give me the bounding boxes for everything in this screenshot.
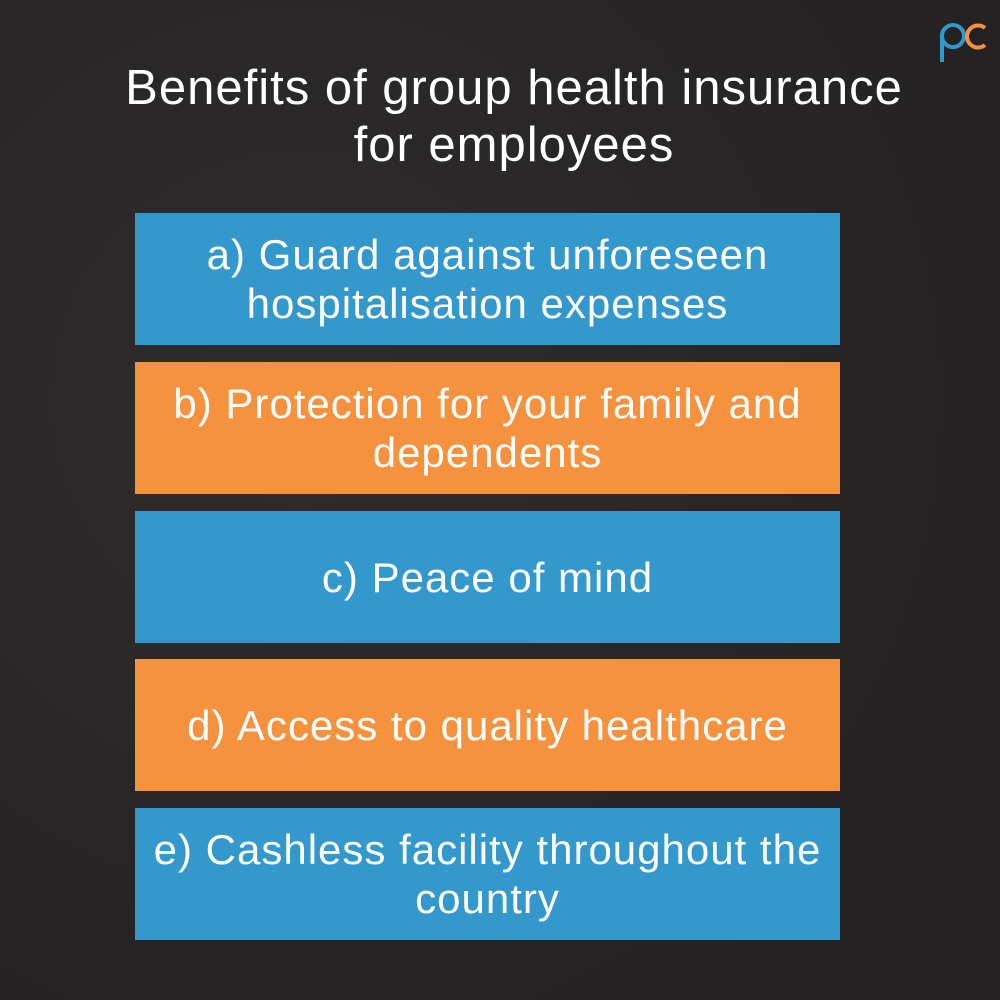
box b: b) Protection for your family and — [173, 380, 802, 427]
box c — [135, 511, 840, 643]
logo — [940, 23, 986, 62]
box e: e) Cashless facility throughout the — [154, 826, 821, 873]
box b: dependents — [373, 429, 602, 476]
box a — [135, 213, 840, 345]
box e: country — [415, 875, 560, 922]
title: Benefits of group health insurance — [125, 61, 903, 115]
box a: hospitalisation expenses — [247, 280, 728, 327]
box c: c) Peace of mind — [322, 554, 653, 600]
title — [125, 61, 903, 172]
box a: a) Guard against unforeseen — [207, 231, 768, 278]
box d — [135, 659, 840, 791]
title: for employees — [354, 118, 674, 172]
box e — [135, 808, 840, 940]
box d: d) Access to quality healthcare — [187, 702, 788, 748]
box b — [135, 362, 840, 494]
